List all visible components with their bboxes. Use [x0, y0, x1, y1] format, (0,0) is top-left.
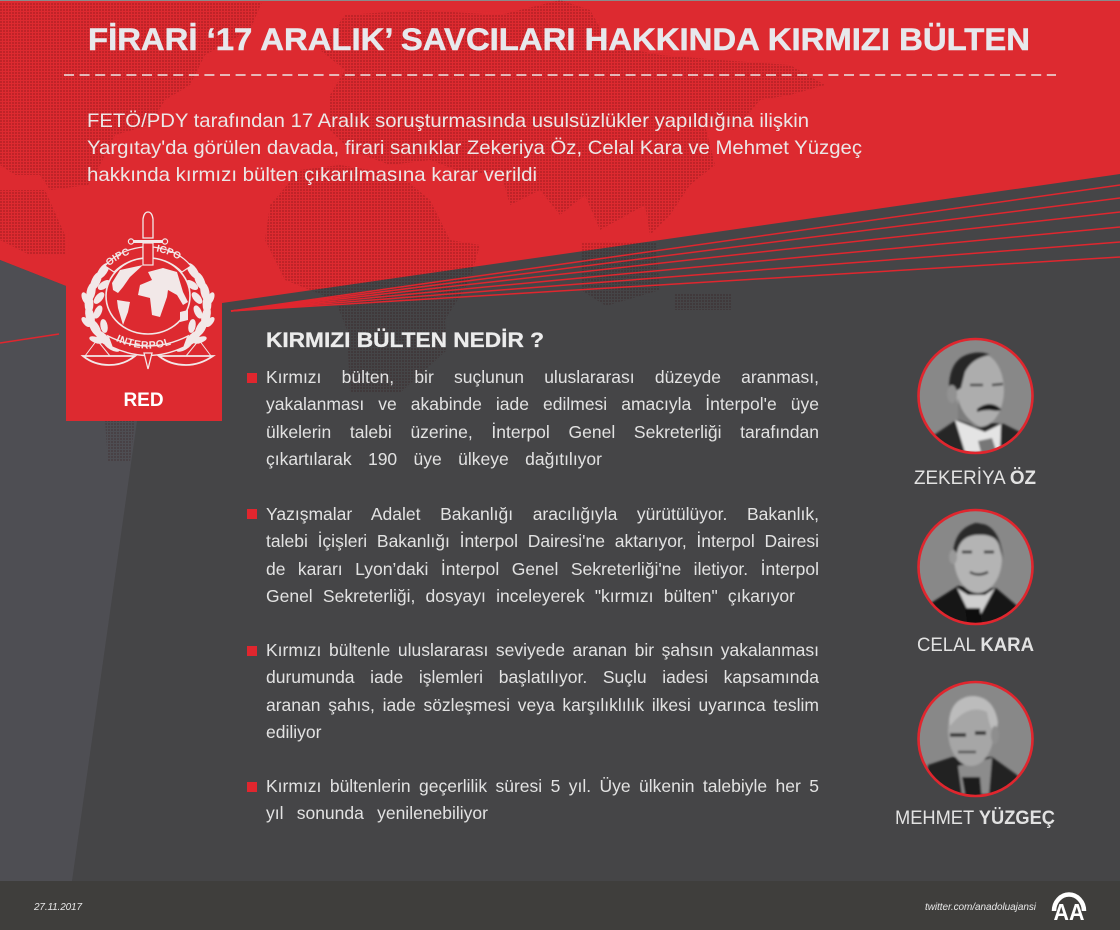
- text block: paragraph 3: durumunda iade işlemleri başlatılıyor. Suçlu iadesi kapsamında: [266, 667, 819, 687]
- text block: paragraph 3: ediliyor: [266, 722, 321, 742]
- portrait: Mehmet Yüzgeç: [918, 682, 1032, 800]
- bullet: [247, 782, 256, 792]
- icon: interpol emblem: [80, 211, 216, 370]
- text block: paragraph 3: aranan şahıs, iade sözleşmesi veya karşılıklılık ilkesi uyarınca teslim: [266, 695, 819, 715]
- text block: paragraph 1: [247, 367, 819, 469]
- bullet: [247, 646, 256, 656]
- name: Zekeriya Öz: ZEKERİYA ÖZ: [914, 468, 1036, 489]
- text block: paragraph 1: ülkelerin talebi üzerine, İnterpol Genel Sekreterliği tarafından: [266, 422, 819, 442]
- text block: paragraph 4: yıl sonunda yenilenebiliyor: [266, 803, 488, 823]
- text block: paragraph 1: Kırmızı bülten, bir suçlunun uluslararası düzeyde aranması,: [266, 367, 819, 387]
- text block: paragraph 1: yakalanması ve akabinde iade edilmesi amacıyla İnterpol'e üye: [266, 394, 819, 414]
- text block: paragraph 4: [247, 776, 819, 823]
- panel: wanted prosecutors: [895, 338, 1055, 829]
- icon: interpol emblem: OIPC: [106, 248, 129, 265]
- intro text block: hakkında kırmızı bülten çıkarılmasına karar verildi: [87, 164, 537, 186]
- intro text block: Yargıtay'da görülen davada, firari sanıklar Zekeriya Öz, Celal Kara ve Mehmet Yüzgeç: [87, 137, 862, 159]
- portrait: Celal Kara: [918, 510, 1032, 630]
- icon: interpol emblem: ICPO: [156, 244, 181, 258]
- text block: paragraph 4: Kırmızı bültenlerin geçerlilik süresi 5 yıl. Üye ülkenin talebiyle her 5: [266, 776, 819, 796]
- red label: RED: [123, 390, 164, 411]
- panel: interpol red badge: [80, 211, 216, 411]
- text block: paragraph 2: de kararı Lyon’daki İnterpol Genel Sekreterliği'ne iletiyor. İnterpol: [266, 559, 819, 579]
- text block: paragraph 1: çıkartılarak 190 üye ülkeye dağıtılıyor: [266, 449, 602, 469]
- icon: anadolu agency logo: AA: [1054, 899, 1084, 925]
- text block: paragraph 3: Kırmızı bültenle uluslararası seviyede aranan bir şahsın yakalanması: [266, 640, 819, 660]
- intro text block: [87, 110, 862, 186]
- text block: paragraph 2: Genel Sekreterliği, dosyayı inceleyerek "kırmızı bülten" çıkarıyor: [266, 586, 795, 606]
- icon: interpol emblem: INTERPOL: [116, 334, 171, 349]
- name: Mehmet Yüzgeç: MEHMET YÜZGEÇ: [895, 808, 1055, 829]
- heading: KIRMIZI BÜLTEN NEDİR ?: [266, 329, 544, 352]
- twitter handle: twitter.com/anadoluajansi: [925, 902, 1037, 913]
- text block: paragraph 2: Yazışmalar Adalet Bakanlığı aracılığıyla yürütülüyor. Bakanlık,: [266, 504, 819, 524]
- bullet: [247, 509, 256, 518]
- text block: paragraph 2: talebi İçişleri Bakanlığı İnterpol Dairesi'ne aktarıyor, İnterpol Dairesi: [266, 531, 819, 551]
- footer bar: [33, 892, 1086, 925]
- title: FİRARİ ‘17 ARALIK’ SAVCILARI HAKKINDA KIRMIZI BÜLTEN: [88, 21, 1030, 57]
- bullet: [247, 373, 256, 382]
- intro text block: FETÖ/PDY tarafından 17 Aralık soruşturmasında usulsüzlükler yapıldığına ilişkin: [87, 110, 809, 132]
- portrait: Zekeriya Öz: [918, 339, 1032, 460]
- text block: paragraph 2: [247, 504, 819, 606]
- text block: paragraph 3: [247, 640, 819, 742]
- date: 27.11.2017: [33, 902, 82, 913]
- name: Celal Kara: CELAL KARA: [917, 635, 1034, 656]
